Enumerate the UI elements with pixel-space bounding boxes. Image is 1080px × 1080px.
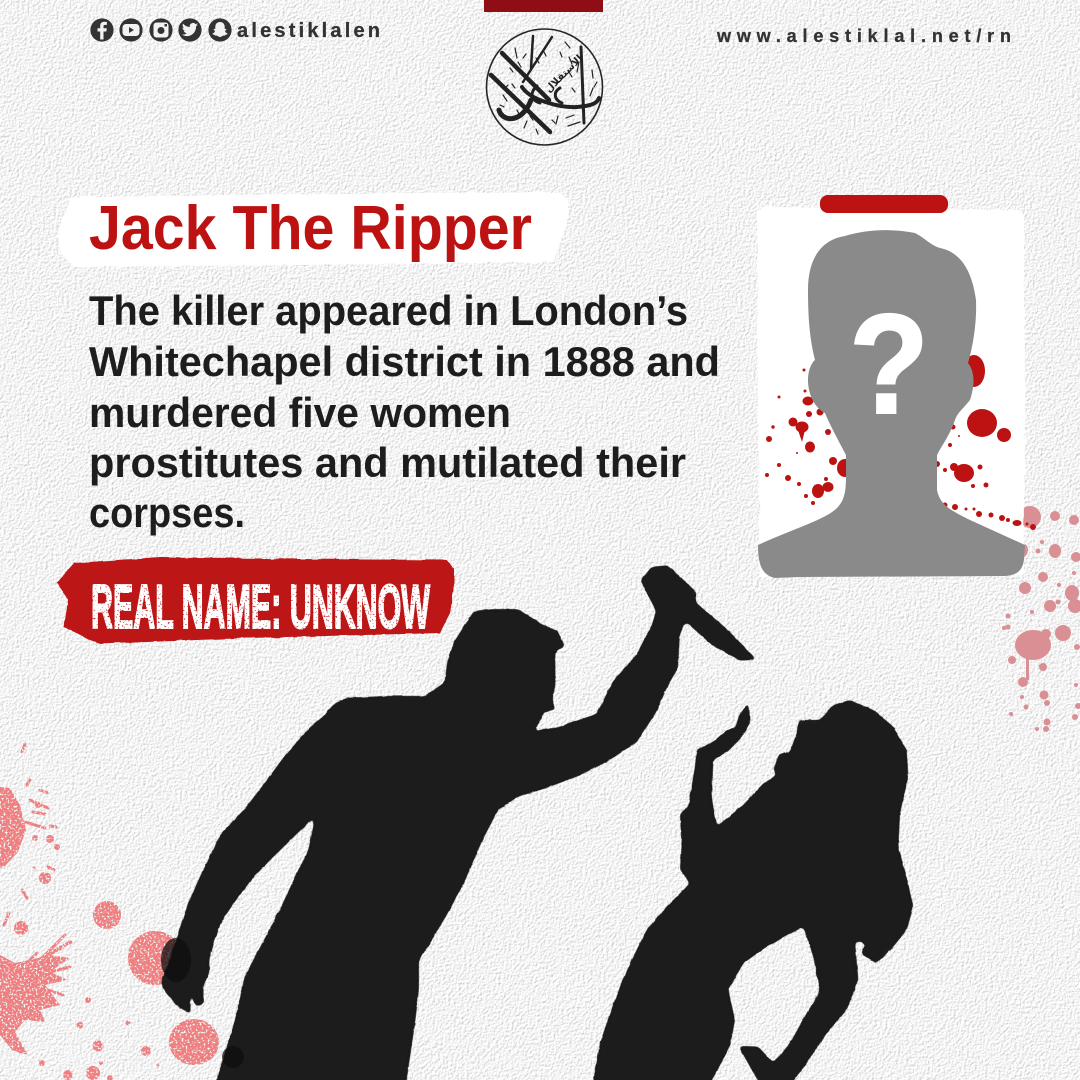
real name banner: REAL NAME: UNKNOW [91, 573, 430, 642]
logo: circular calligraphy emblem: الاستقلال [543, 53, 585, 95]
logo: circular calligraphy emblem [486, 29, 602, 145]
blood splatter: right side, faded [1002, 506, 1080, 732]
icon: youtube [119, 18, 143, 42]
question mark: ? [849, 284, 929, 443]
red tape [820, 195, 948, 213]
title banner [58, 192, 568, 267]
social media icons [90, 18, 232, 42]
icon: twitter [178, 18, 202, 42]
description text: corpses. [89, 489, 245, 536]
description text: prostitutes and mutilated their [89, 439, 686, 486]
woman silhouette [590, 700, 913, 1080]
blood splatter on card [765, 355, 1036, 530]
website url: www.alestiklal.net/rn [716, 26, 1011, 46]
icon: instagram [149, 18, 173, 42]
dark overlap spots on man [161, 938, 244, 1068]
blood splatter: lower left, speckled [0, 744, 219, 1080]
real name banner [56, 557, 454, 644]
icon: snapchat [208, 18, 232, 42]
description text [89, 287, 720, 536]
head and shoulders silhouette [758, 230, 1025, 578]
description text: The killer appeared in London’s [89, 287, 688, 334]
description text: murdered five women [89, 389, 511, 436]
card background [757, 207, 1025, 577]
portrait card [757, 195, 1036, 578]
man silhouette with knife [161, 565, 757, 1080]
title: Jack The Ripper [89, 194, 532, 263]
social handle: alestiklalen [237, 20, 380, 42]
description text: Whitechapel district in 1888 and [89, 338, 720, 385]
decorative top bar [484, 0, 603, 12]
icon: facebook [90, 18, 114, 42]
